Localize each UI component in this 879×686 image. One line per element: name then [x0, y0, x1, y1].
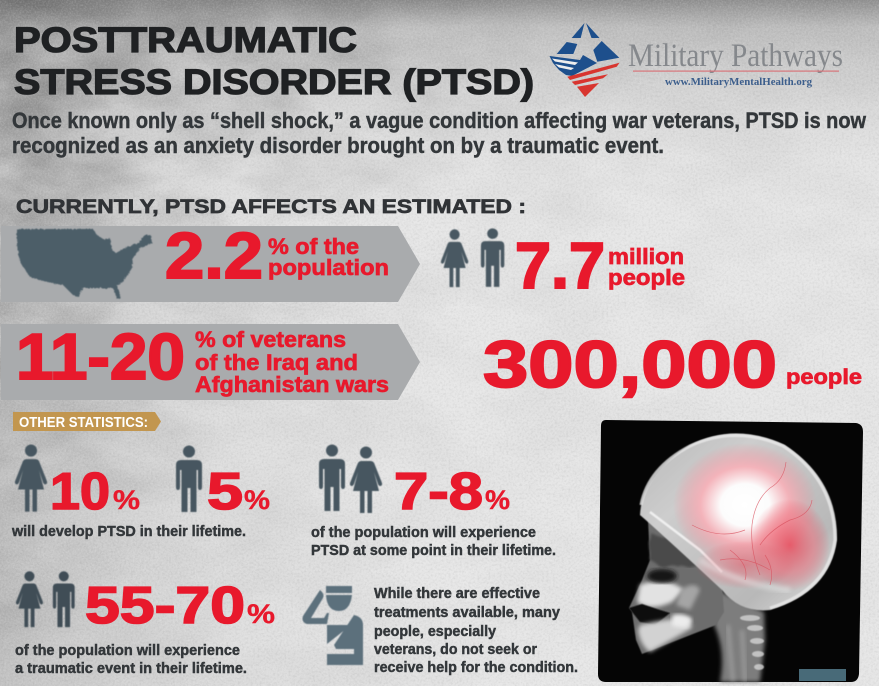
icon: star diamond: [550, 23, 620, 97]
stat label: Afghanistan wars: [195, 372, 389, 397]
stat: 300,000 people: people: [786, 366, 862, 389]
text: population experience PTSD: [311, 525, 556, 559]
panel: veterans arrow: [1, 320, 420, 400]
cranium: [640, 434, 837, 610]
stat: 7.7 million people: 7.7: [515, 229, 605, 302]
stat: 5 percent men: 5: [207, 463, 243, 521]
stat: 7-8 percent: 7-8: [394, 463, 483, 521]
stat: 10 percent women: [15, 445, 140, 521]
x-ray image of skull: [598, 420, 863, 682]
brain glow: [673, 443, 817, 567]
tag: other statistics: OTHER STATISTICS:: [19, 415, 148, 431]
text: population experience PTSD: PTSD at some point in their lifetime.: [311, 543, 556, 559]
text: population experience PTSD: of the population will experience: [311, 525, 536, 541]
stat: 55-70 percent: [16, 571, 275, 635]
text: traumatic event: a traumatic event in their lifetime.: [15, 661, 247, 677]
icon: man and woman: [319, 444, 382, 513]
stat: 7.7 million people: people: [608, 265, 685, 290]
stat: 7-8 percent: %: [485, 485, 510, 515]
stat: 55-70 percent: 55-70: [85, 577, 245, 635]
stat: 7-8 percent: [319, 444, 510, 521]
stat: 300,000 people: 300,000: [483, 327, 777, 401]
url: www.MilitaryMentalHealth.org: [665, 77, 812, 88]
icon: man: [176, 446, 202, 512]
wordmark: Military Pathways: [628, 38, 843, 74]
stat label: population: [268, 255, 389, 280]
scale bar: [799, 669, 846, 681]
stat: 55-70 percent: %: [247, 599, 275, 629]
stat: 5 percent men: %: [244, 485, 270, 515]
text: treatment note: While there are effective: [374, 586, 540, 602]
text: traumatic event: of the population will experience: [15, 643, 240, 659]
icon: US map: [17, 229, 152, 299]
text: will develop PTSD: will develop PTSD in their lifetime.: [11, 524, 246, 540]
text: treatment note: [374, 586, 578, 676]
stat label: [268, 234, 389, 280]
stat: 10 percent women: %: [113, 485, 140, 515]
title: STRESS DISORDER (PTSD): [14, 63, 534, 102]
stat label: of the Iraq and: [195, 350, 358, 375]
heading: currently: CURRENTLY, PTSD AFFECTS AN ESTIMATED :: [16, 196, 526, 218]
panel: 2.2 percent arrow: [1, 219, 420, 302]
title: POSTTRAUMATIC: [14, 21, 357, 60]
face and jaw: [629, 520, 724, 654]
title: [14, 21, 534, 102]
logo: Military Pathways: [550, 23, 843, 97]
stat: 300,000 people: [483, 327, 862, 401]
stat label: % of the: [268, 234, 359, 259]
stat: 7.7 million people: [515, 229, 685, 302]
stat label: [195, 327, 389, 397]
neck: [714, 590, 765, 682]
stat label: % of veterans: [195, 327, 346, 352]
stat: 2.2: 2.2: [165, 219, 263, 292]
intro text: recognized as an anxiety disorder brought on by a traumatic event.: [12, 133, 664, 158]
stat: 7.7 million people: million: [608, 244, 684, 269]
icon: woman: [15, 445, 47, 512]
stat: 10 percent women: 10: [50, 463, 110, 521]
icon: woman and man: [441, 228, 504, 287]
stat: 11-20: 11-20: [16, 320, 185, 393]
text: treatment note: people, especially: [374, 624, 496, 640]
intro text: [12, 108, 867, 158]
text: treatment note: treatments available, many: [374, 605, 560, 621]
text: treatment note: veterans, do not seek or: [374, 642, 537, 658]
stat: 5 percent men: [176, 446, 270, 521]
icon: woman and man: [16, 571, 75, 627]
text: traumatic event: [15, 643, 247, 677]
text: treatment note: receive help for the condition.: [374, 660, 578, 676]
icon: saluting soldier: [302, 586, 363, 665]
